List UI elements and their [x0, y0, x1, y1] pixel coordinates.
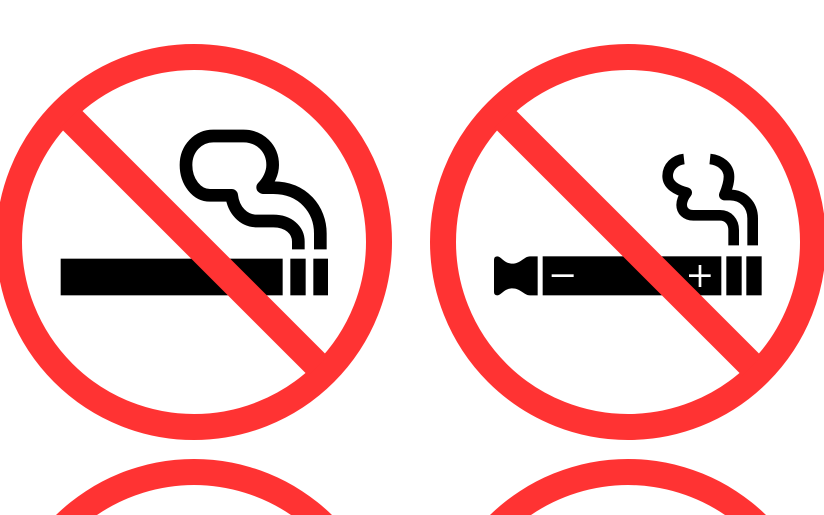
icon: cigarette with smoke: [61, 136, 328, 295]
cropped sign ring: lower right: [490, 459, 766, 515]
red prohibition ring: [9, 57, 379, 427]
e-cigarette mouthpiece: [494, 256, 538, 295]
e-cigarette battery with minus and plus: [543, 256, 721, 295]
cropped sign ring: lower left: [56, 459, 332, 515]
sign: no vaping: [443, 57, 813, 427]
red prohibition slash: [504, 118, 752, 366]
red prohibition slash: [70, 118, 318, 366]
red prohibition ring: [443, 57, 813, 427]
e-cigarette tip segments: [726, 256, 762, 295]
icon: e-cigarette with vapour: [494, 159, 762, 295]
smoke plumes: [186, 136, 320, 257]
cigarette body: [61, 259, 328, 295]
vapour plumes: [668, 159, 753, 253]
sign: no smoking: [9, 57, 379, 427]
